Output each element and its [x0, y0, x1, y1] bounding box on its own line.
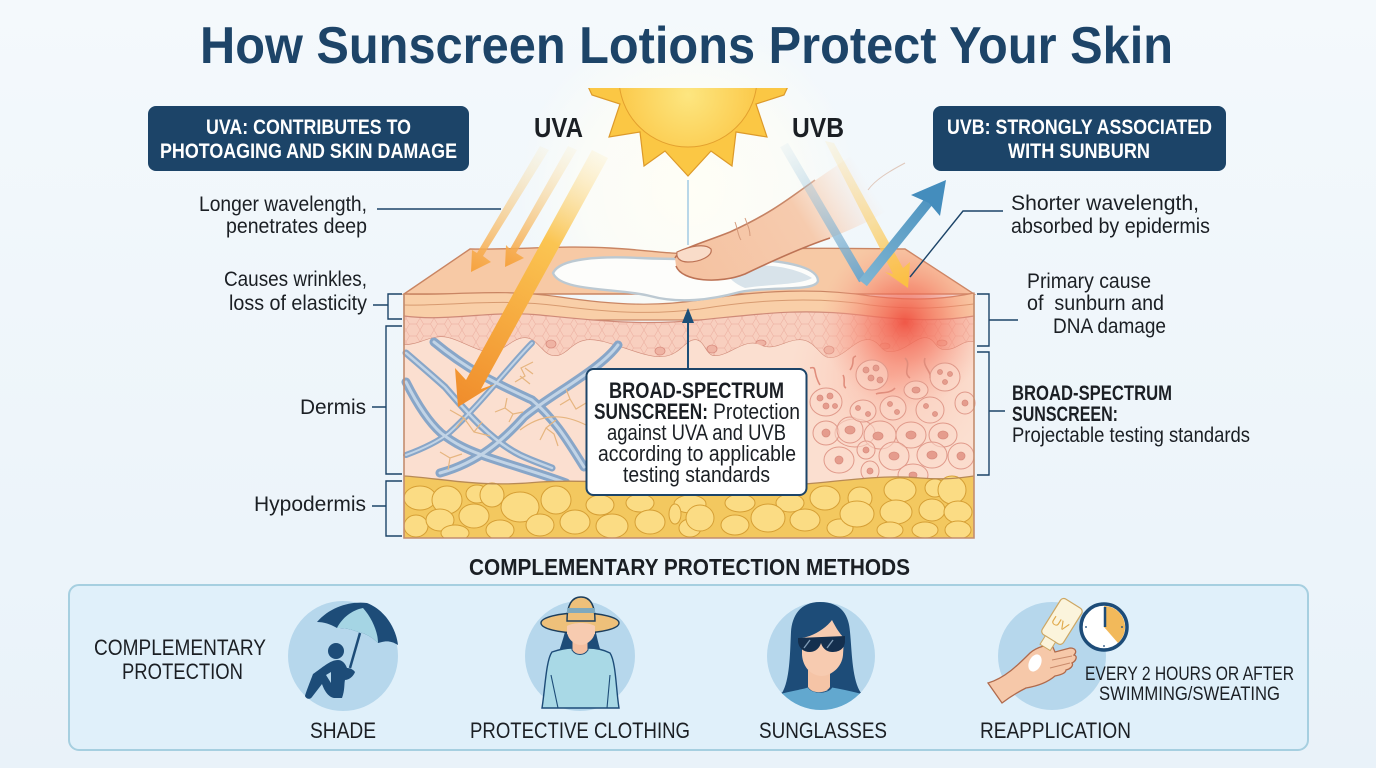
left annotations: loss of elasticity [229, 292, 367, 315]
icon: reapplication [988, 597, 1127, 710]
right annotations: DNA damage [1053, 315, 1166, 338]
reapplication note: SWIMMING/SWEATING [1099, 684, 1280, 705]
label: protective clothing: PROTECTIVE CLOTHING [470, 718, 690, 743]
reapplication note [1085, 664, 1294, 705]
icon: protective clothing [525, 597, 635, 711]
UVA arrows [455, 146, 608, 407]
callout: UVB header [933, 106, 1226, 171]
bracket: hypodermis [372, 481, 402, 536]
right annotations: Projectable testing standards [1012, 424, 1250, 447]
callout: UVB header: UVB: STRONGLY ASSOCIATED [947, 116, 1212, 139]
sun ray [687, 180, 689, 245]
left annotations [199, 193, 367, 516]
panel: complementary protection [69, 585, 1308, 750]
right annotations: Shorter wavelength, [1011, 192, 1199, 215]
label: sunglasses: SUNGLASSES [759, 718, 887, 743]
callout: broad-spectrum sunscreen: according to applicable [598, 441, 796, 466]
right annotations: absorbed by epidermis [1011, 215, 1210, 238]
left annotations: Dermis [300, 396, 366, 419]
panel label [94, 635, 266, 684]
right annotations: BROAD-SPECTRUM [1012, 382, 1172, 405]
redness of sunburn [824, 250, 973, 442]
arrow: callout to sunscreen layer [682, 308, 694, 369]
heading: complementary protection methods: COMPLEMENTARY PROTECTION METHODS [469, 554, 910, 580]
right annotations [1011, 192, 1250, 447]
dermis [404, 337, 974, 490]
bracket: dermis right [977, 352, 1005, 475]
title: How Sunscreen Lotions Protect Your Skin [200, 17, 1173, 75]
label: UVA: UVA [534, 112, 583, 143]
panel label: COMPLEMENTARY [94, 635, 266, 660]
hypodermis fat layer [404, 476, 974, 541]
callout: broad-spectrum sunscreen: Protection [713, 399, 800, 424]
leader: shorter wavelength [910, 211, 1003, 277]
callout: broad-spectrum sunscreen: against UVA and UVB [607, 420, 786, 445]
icon: reapplication: UV [1049, 613, 1071, 634]
callout: UVA header: UVA: CONTRIBUTES TO [206, 116, 411, 139]
callout: UVA header: PHOTOAGING AND SKIN DAMAGE [160, 140, 457, 163]
leader: longer wavelength [377, 208, 501, 210]
UVB arrows [784, 141, 946, 288]
reapplication note: EVERY 2 HOURS OR AFTER [1085, 664, 1294, 685]
callout: broad-spectrum sunscreen: BROAD-SPECTRUM [609, 378, 784, 403]
label: UVB: UVB [792, 112, 844, 143]
skin top surface [404, 247, 974, 294]
right annotations: SUNSCREEN: [1012, 403, 1118, 426]
icon: sunglasses [767, 602, 875, 710]
left annotations: Hypodermis [254, 493, 366, 516]
sun [588, 88, 788, 177]
bracket: epidermis right [977, 294, 1018, 346]
right annotations: of sunburn and [1027, 292, 1164, 315]
callout: broad-spectrum sunscreen: SUNSCREEN: [594, 399, 708, 424]
sunscreen layer [553, 257, 818, 300]
callout: UVB header: WITH SUNBURN [1008, 140, 1150, 163]
icon: shade [288, 601, 398, 711]
stratum layer [404, 291, 974, 320]
basal cells [546, 340, 947, 355]
skin cross-section [404, 247, 975, 541]
sun glow [500, 20, 876, 360]
label: shade: SHADE [310, 718, 376, 743]
left annotations: penetrates deep [226, 215, 367, 238]
callout: UVA header [148, 106, 469, 171]
left annotations: Causes wrinkles, [224, 268, 367, 291]
collagen fibers [406, 342, 618, 483]
bracket: dermis [372, 326, 402, 474]
callout: broad-spectrum sunscreen: testing standards [623, 462, 770, 487]
bracket: epidermis left [373, 294, 402, 319]
callout: broad-spectrum sunscreen [586, 369, 806, 495]
panel label: PROTECTION [122, 659, 243, 684]
epidermis cell layer [404, 312, 974, 358]
label: reapplication: REAPPLICATION [980, 718, 1131, 743]
left annotations: Longer wavelength, [199, 193, 367, 216]
dermal cells [810, 356, 975, 486]
skin block outline [404, 294, 974, 538]
right annotations: Primary cause [1027, 270, 1151, 293]
finger applying sunscreen [675, 143, 905, 280]
